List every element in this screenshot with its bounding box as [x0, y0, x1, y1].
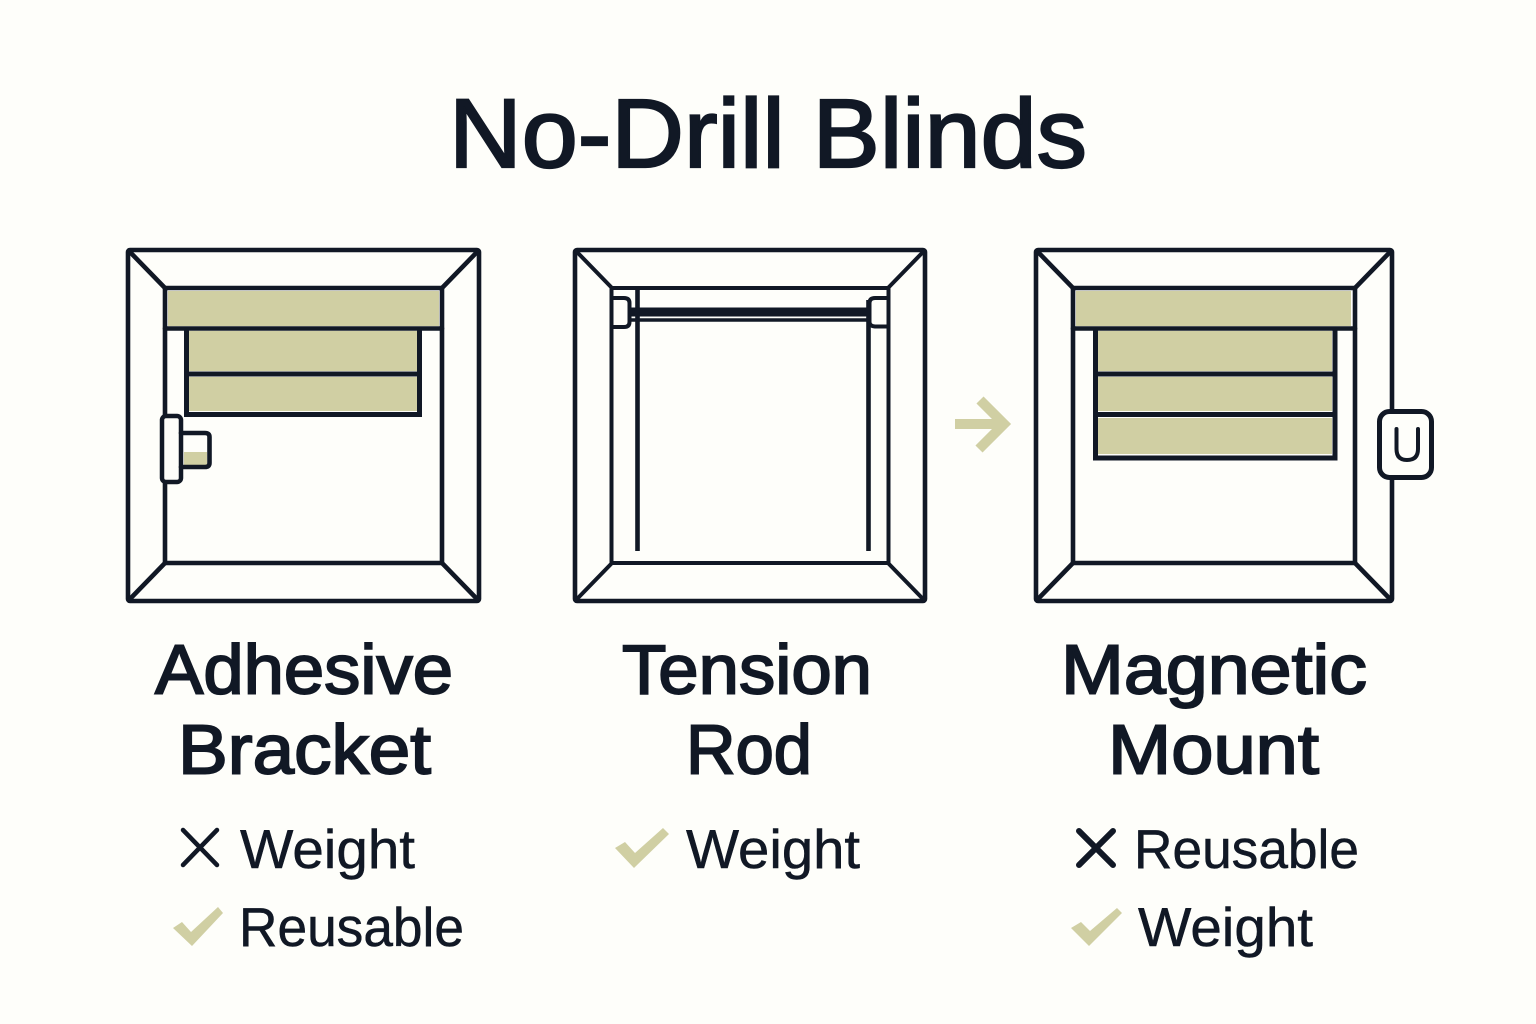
- label: magnetic mount: [1061, 630, 1367, 788]
- text: weight: Weight: [1138, 896, 1313, 958]
- list: tension rod pros: [615, 818, 860, 880]
- window frame: [128, 250, 479, 601]
- label: magnetic mount: Mount: [1108, 710, 1319, 788]
- blind slats: [1096, 329, 1335, 458]
- tension rod: [630, 312, 870, 320]
- icon: check: [615, 828, 669, 868]
- text: weight: Weight: [240, 818, 415, 880]
- panel: magnetic mount window: [1036, 250, 1432, 601]
- icon: check: [1071, 908, 1122, 946]
- title: No-Drill Blinds: [449, 79, 1087, 188]
- window frame: [575, 250, 925, 601]
- icon: cross: [1079, 831, 1113, 865]
- window frame: [1036, 250, 1392, 601]
- blind headrail: [1073, 291, 1355, 328]
- right rod end cap: [870, 298, 887, 326]
- label: tension rod: Rod: [686, 710, 812, 788]
- label: adhesive bracket: [155, 630, 453, 788]
- label: adhesive bracket: Adhesive: [155, 630, 453, 708]
- panel: adhesive bracket window: [128, 250, 479, 601]
- blind headrail: [165, 291, 442, 328]
- blind slats: [186, 329, 420, 414]
- list: adhesive bracket pros and cons: [173, 818, 464, 958]
- label: tension rod: Tension: [622, 630, 872, 708]
- panel: tension rod window: [575, 250, 925, 601]
- icon: cross: [183, 830, 217, 865]
- text: reusable: Reusable: [239, 896, 464, 958]
- text: weight: Weight: [686, 818, 860, 880]
- icon: adhesive bracket: [162, 416, 210, 482]
- icon: magnet: [1380, 412, 1432, 478]
- list: magnetic mount pros and cons: [1071, 818, 1359, 958]
- arrow: [955, 400, 1004, 449]
- label: tension rod: [622, 630, 872, 788]
- side tracks: [638, 289, 868, 551]
- icon: check: [173, 907, 223, 946]
- text: reusable: Reusable: [1134, 818, 1359, 880]
- label: adhesive bracket: Bracket: [178, 710, 431, 788]
- left rod end cap: [613, 298, 630, 327]
- label: magnetic mount: Magnetic: [1061, 630, 1367, 708]
